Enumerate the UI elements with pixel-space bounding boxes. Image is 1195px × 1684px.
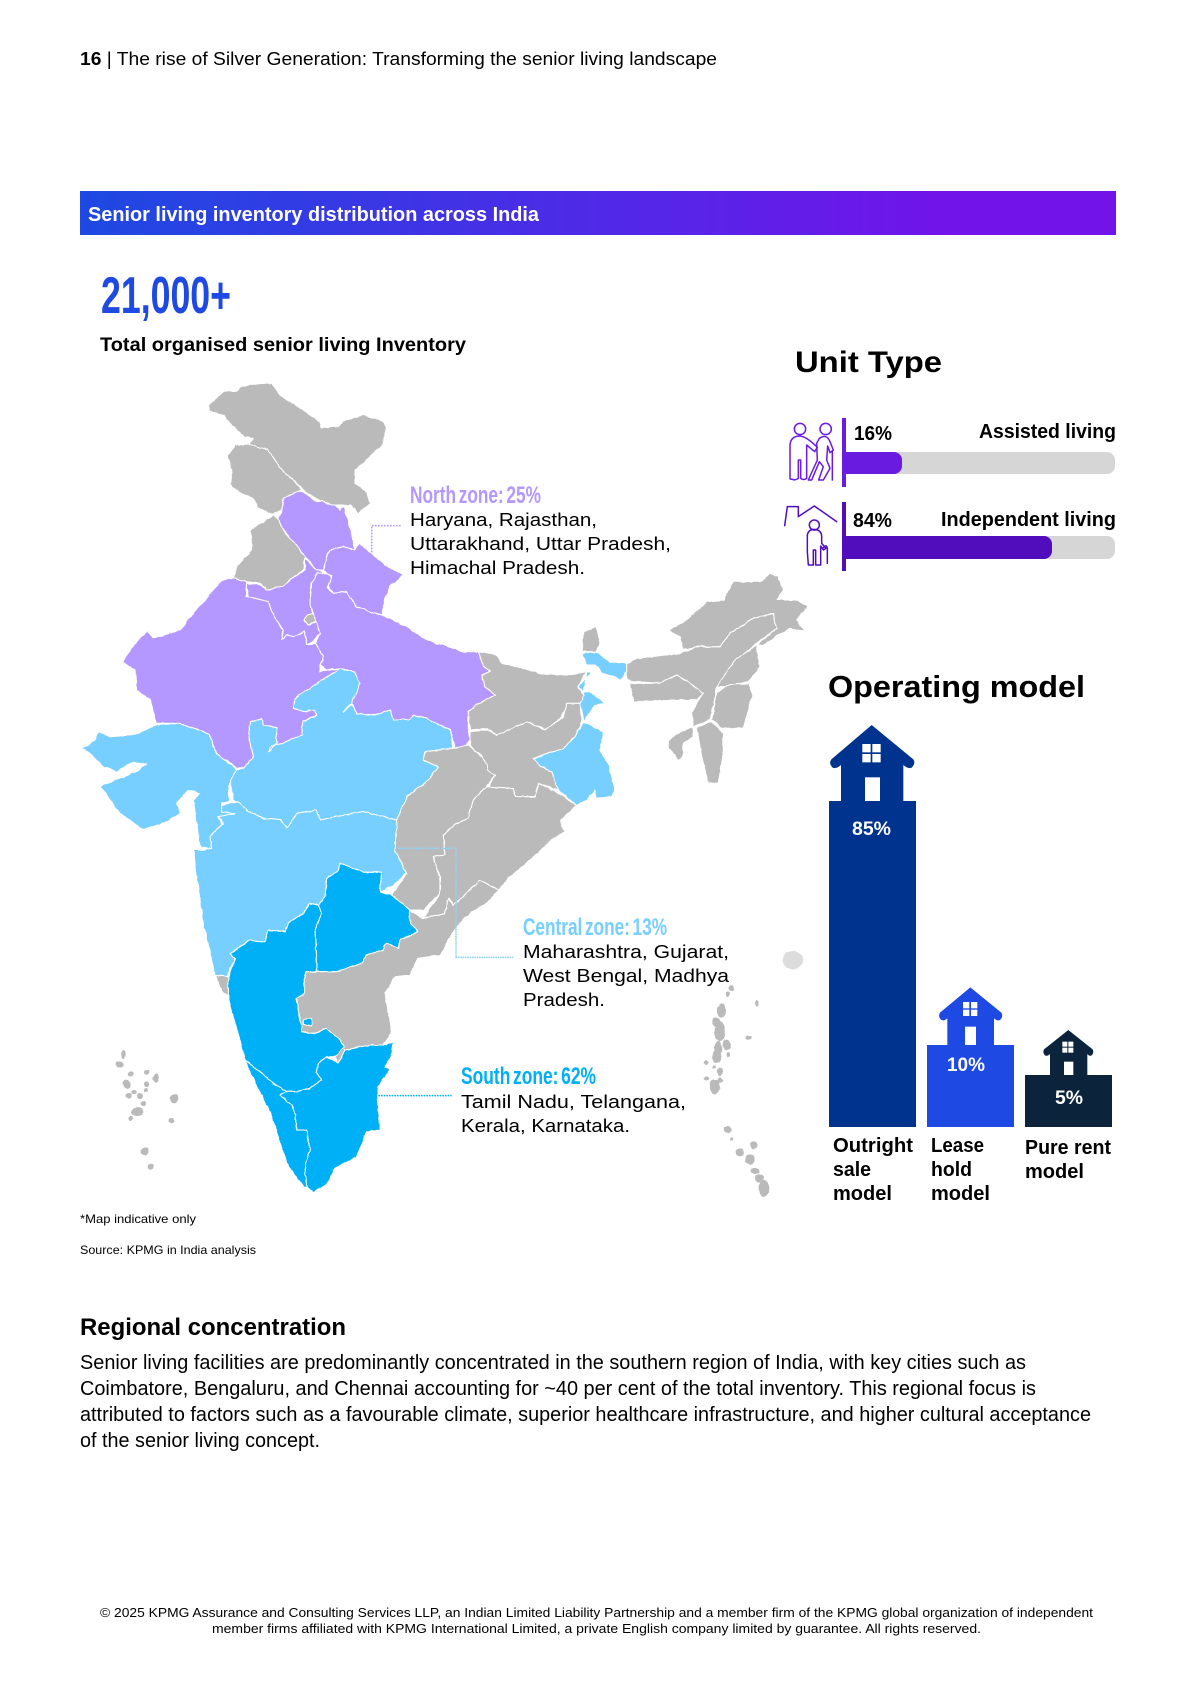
small eastern island blob	[783, 951, 803, 969]
north zone callout	[410, 482, 671, 578]
label: lease hold model: model	[931, 1183, 990, 1205]
label: pure rent model: Pure rent	[1025, 1137, 1111, 1159]
map of India by zone	[82, 383, 808, 1196]
central zone states	[82, 652, 627, 977]
leader lines	[372, 526, 513, 1096]
map note and source	[80, 1212, 256, 1257]
heading: operating model: Operating model	[828, 669, 1085, 704]
house bar: lease hold 10%: 10%	[947, 1055, 985, 1076]
map note and source: *Map indicative only	[80, 1212, 196, 1226]
central zone callout: Pradesh.	[523, 989, 605, 1010]
paragraph: regional concentration	[80, 1352, 1091, 1452]
label: lease hold model	[931, 1135, 990, 1205]
map note and source: Source: KPMG in India analysis	[80, 1243, 256, 1257]
paragraph: regional concentration: Senior living facilities are predominantly concentrated in the southern region of India, with key cities such as	[80, 1352, 1026, 1374]
Andaman and Nicobar islands	[704, 985, 769, 1196]
label: lease hold model: Lease	[931, 1135, 984, 1157]
house bar: outright sale 85%	[829, 725, 916, 1127]
bar: assisted living 16%	[842, 418, 1116, 487]
label: outright sale model: Outright	[833, 1135, 913, 1157]
north zone callout: North zone: 25%	[410, 482, 541, 509]
central zone callout: Central zone: 13%	[523, 914, 667, 941]
bar: independent living 84%: 84%	[853, 510, 892, 532]
label: outright sale model: model	[833, 1183, 892, 1205]
bar: assisted living 16%: 16%	[854, 423, 892, 445]
footer copyright: © 2025 KPMG Assurance and Consulting Services LLP, an Indian Limited Liability Partnership and a member firm of the KPMG global organization of independent	[100, 1605, 1093, 1620]
heading: regional concentration: Regional concentration	[80, 1314, 346, 1341]
label: pure rent model	[1025, 1137, 1111, 1183]
paragraph: regional concentration: of the senior living concept.	[80, 1430, 320, 1452]
title banner: Senior living inventory distribution across India	[88, 204, 540, 226]
south zone states	[228, 863, 418, 1193]
Lakshadweep islands	[115, 1049, 178, 1170]
north zone callout: Himachal Pradesh.	[410, 557, 585, 578]
south zone callout	[461, 1063, 686, 1136]
Puducherry enclave	[303, 1018, 312, 1025]
house bar: pure rent 5%	[1025, 1030, 1112, 1127]
bar: independent living 84%	[842, 502, 1116, 571]
south zone callout: Tamil Nadu, Telangana,	[461, 1091, 686, 1112]
paragraph: regional concentration: attributed to factors such as a favourable climate, superior healthcare infrastructure, and higher cultural acceptance	[80, 1404, 1091, 1426]
paragraph: regional concentration: Coimbatore, Bengaluru, and Chennai accounting for ~40 per cent of the total inventory. This regional focus is	[80, 1378, 1036, 1400]
title banner	[80, 191, 1116, 235]
north zone callout: Haryana, Rajasthan,	[410, 509, 597, 530]
heading: unit type: Unit Type	[795, 346, 942, 379]
house bar: pure rent 5%: 5%	[1055, 1088, 1083, 1109]
house bar: outright sale 85%: 85%	[852, 819, 891, 840]
label: pure rent model: model	[1025, 1161, 1084, 1183]
footer copyright	[100, 1605, 1093, 1636]
north zone callout: Uttarakhand, Uttar Pradesh,	[410, 533, 671, 554]
south zone callout: Kerala, Karnataka.	[461, 1115, 630, 1136]
label: outright sale model: sale	[833, 1159, 871, 1181]
headline stat: total inventory	[100, 267, 466, 356]
states outside the named zones	[209, 383, 808, 1063]
bar: assisted living 16%: Assisted living	[979, 421, 1116, 443]
icon: carer assisting senior	[790, 423, 833, 480]
central zone callout: West Bengal, Madhya	[523, 965, 730, 986]
icon: senior at home	[785, 506, 837, 565]
central zone callout	[523, 914, 730, 1010]
headline stat: total inventory: Total organised senior living Inventory	[100, 335, 466, 356]
page header: 16 | The rise of Silver Generation: Transforming the senior living landscape	[80, 49, 717, 69]
label: lease hold model: hold	[931, 1159, 972, 1181]
footer copyright: member firms affiliated with KPMG International Limited, a private English company limited by guarantee. All rights reserved.	[212, 1621, 981, 1636]
north zone states	[122, 491, 495, 768]
headline stat: total inventory: 21,000+	[101, 267, 231, 325]
house bar: lease hold 10%	[927, 987, 1014, 1127]
bar: independent living 84%: Independent living	[941, 509, 1116, 531]
south zone callout: South zone: 62%	[461, 1063, 596, 1090]
label: outright sale model	[833, 1135, 913, 1205]
central zone callout: Maharashtra, Gujarat,	[523, 941, 729, 962]
